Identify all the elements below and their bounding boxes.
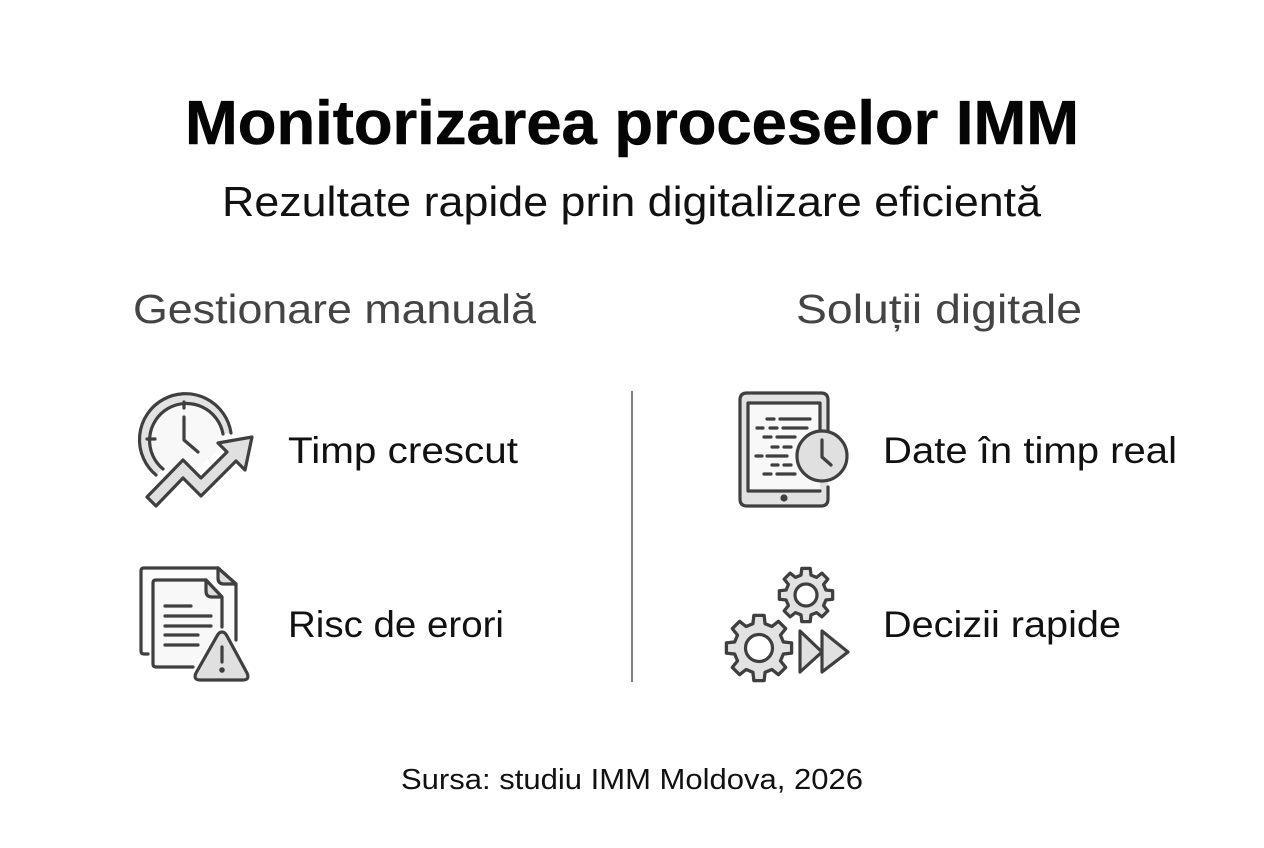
icon: documents with warning — [141, 568, 248, 680]
right column heading: Soluții digitale — [796, 286, 1082, 332]
label: Decizii rapide: Decizii rapide — [883, 604, 1121, 645]
icon: gears with fast-forward — [726, 568, 848, 681]
source note: Sursa: studiu IMM Moldova, 2026 — [401, 764, 863, 796]
label: Timp crescut: Timp crescut — [288, 430, 519, 471]
title: Monitorizarea proceselor IMM — [185, 89, 1079, 158]
left column heading: Gestionare manuală — [133, 286, 536, 332]
icon: tablet with clock — [740, 393, 847, 506]
divider — [631, 391, 633, 682]
icon: clock with rising arrow — [139, 394, 252, 506]
label: Date în timp real: Date în timp real — [883, 430, 1177, 471]
subtitle: Rezultate rapide prin digitalizare eficientă — [222, 178, 1042, 225]
label: Risc de erori: Risc de erori — [288, 604, 504, 645]
